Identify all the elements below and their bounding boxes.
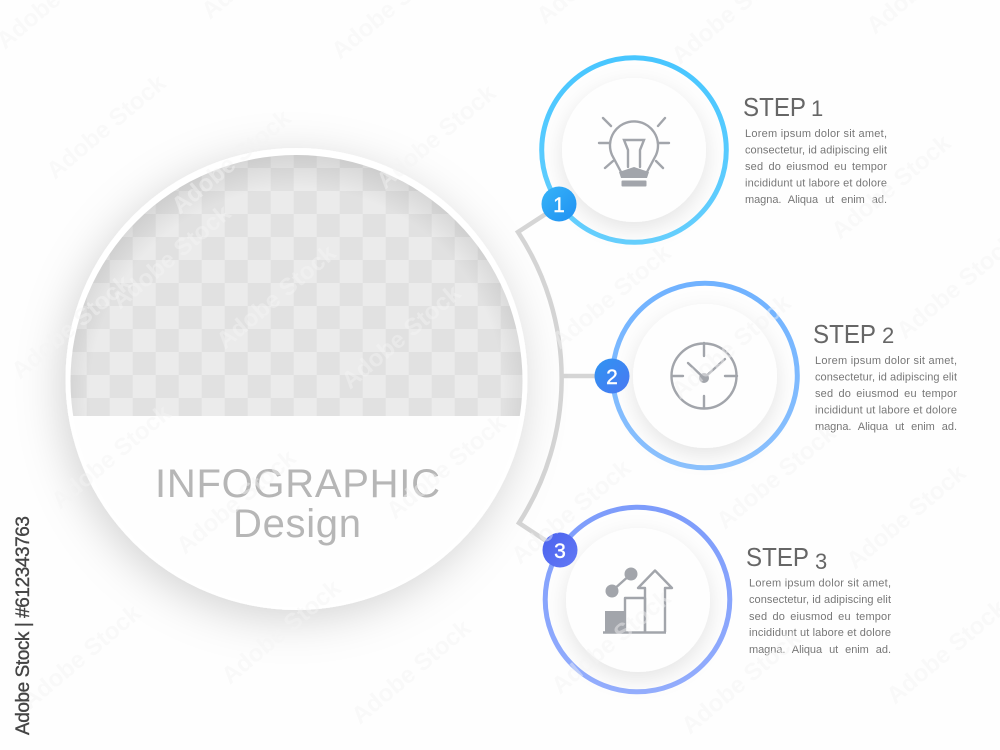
text block: step 1: consectetur, id adipiscing elit [745,144,887,156]
watermark pattern: Adobe Stock [712,419,842,535]
text block: step 2: consectetur, id adipiscing elit [815,372,957,384]
text block: step 1 [743,92,887,206]
icon: clock [672,343,737,408]
watermark pattern: Adobe Stock [217,574,347,690]
lower circle face [70,155,522,607]
badge 3: 3 [554,540,566,563]
watermark pattern: Adobe Stock [212,239,342,355]
panel: step 3 circle [542,507,730,692]
badge 2: 2 [606,366,618,389]
text block: step 2: Lorem ipsum dolor sit amet, [815,355,957,367]
text block: step 2 [813,319,957,433]
badge 1: 1 [553,194,565,217]
inner disc 2 [633,304,777,448]
icon: light bulb [599,118,669,186]
title: INFOGRAPHIC Design [155,462,440,546]
watermark pattern: Adobe Stock [507,454,637,570]
stock id side label: Adobe Stock | #612343763 [13,516,34,735]
watermark pattern: Adobe Stock [547,584,677,700]
panel: step 1 circle [542,58,726,242]
watermark pattern: Adobe Stock [42,69,172,185]
ring 1 [542,58,726,242]
text block: step 3: 3 [815,549,827,574]
text block: step 1: incididunt ut labore et dolore [745,178,887,190]
inner disc 1 [562,78,706,222]
text block: step 1: 1 [811,96,823,121]
text block: step 3 [746,542,891,656]
title: INFOGRAPHIC Design: Design [233,502,361,546]
text block: step 2: incididunt ut labore et dolore [815,404,957,416]
text block: step 3: incididunt ut labore et dolore [749,627,891,639]
panel: main circle [66,148,528,610]
text block: step 2: 2 [882,323,894,348]
badge 3 [542,532,578,568]
watermark pattern: Adobe Stock [827,129,957,245]
watermark pattern: Adobe Stock [167,104,297,220]
watermark pattern: Adobe Stock [172,444,302,560]
watermark pattern: Adobe Stock [667,289,797,405]
connector: curved line with three branches [518,206,612,550]
text block: step 3: consectetur, id adipiscing elit [749,594,891,606]
watermark pattern: Adobe Stock [842,459,972,575]
icon: growth chart with arrow [603,568,672,632]
watermark pattern: Adobe Stock [382,409,512,525]
watermark pattern: Adobe Stock [7,269,137,385]
text block: step 1: Lorem ipsum dolor sit amet, [745,128,887,140]
text block: step 3: Lorem ipsum dolor sit amet, [749,578,891,590]
badge 1 [542,186,576,222]
text block: step 2: magna. Aliqua ut enim ad. [815,421,957,433]
watermark pattern: Adobe Stock [677,624,807,740]
watermark pattern: Adobe Stock [47,399,177,515]
text block: step 1: STEP [743,92,806,122]
watermark pattern: Adobe Stock [372,79,502,195]
watermark pattern: Adobe Stock [107,199,237,315]
panel: step 2 circle [594,283,797,468]
ring 3 [545,507,730,692]
inner disc 3 [566,528,710,672]
image placeholder checkerboard [70,155,522,416]
white ring base [66,148,528,610]
text block: step 2: sed do eiusmod eu tempor [815,388,957,400]
watermark pattern: Adobe Stock [347,614,477,730]
watermark pattern: Adobe Stock [17,599,147,715]
text block: step 1: sed do eiusmod eu tempor [745,161,887,173]
text block: step 3: sed do eiusmod eu tempor [749,611,891,623]
text block: step 3: STEP [746,542,809,572]
text block: step 2: STEP [813,319,876,349]
watermark pattern: Adobe Stock [337,279,467,395]
title: INFOGRAPHIC Design: INFOGRAPHIC [155,462,440,506]
badge 2 [594,358,630,394]
watermark pattern: Adobe Stock [547,239,677,355]
ring 2 [613,283,797,468]
text block: step 3: magna. Aliqua ut enim ad. [749,644,891,656]
text block: step 1: magna. Aliqua ut enim ad. [745,194,887,206]
